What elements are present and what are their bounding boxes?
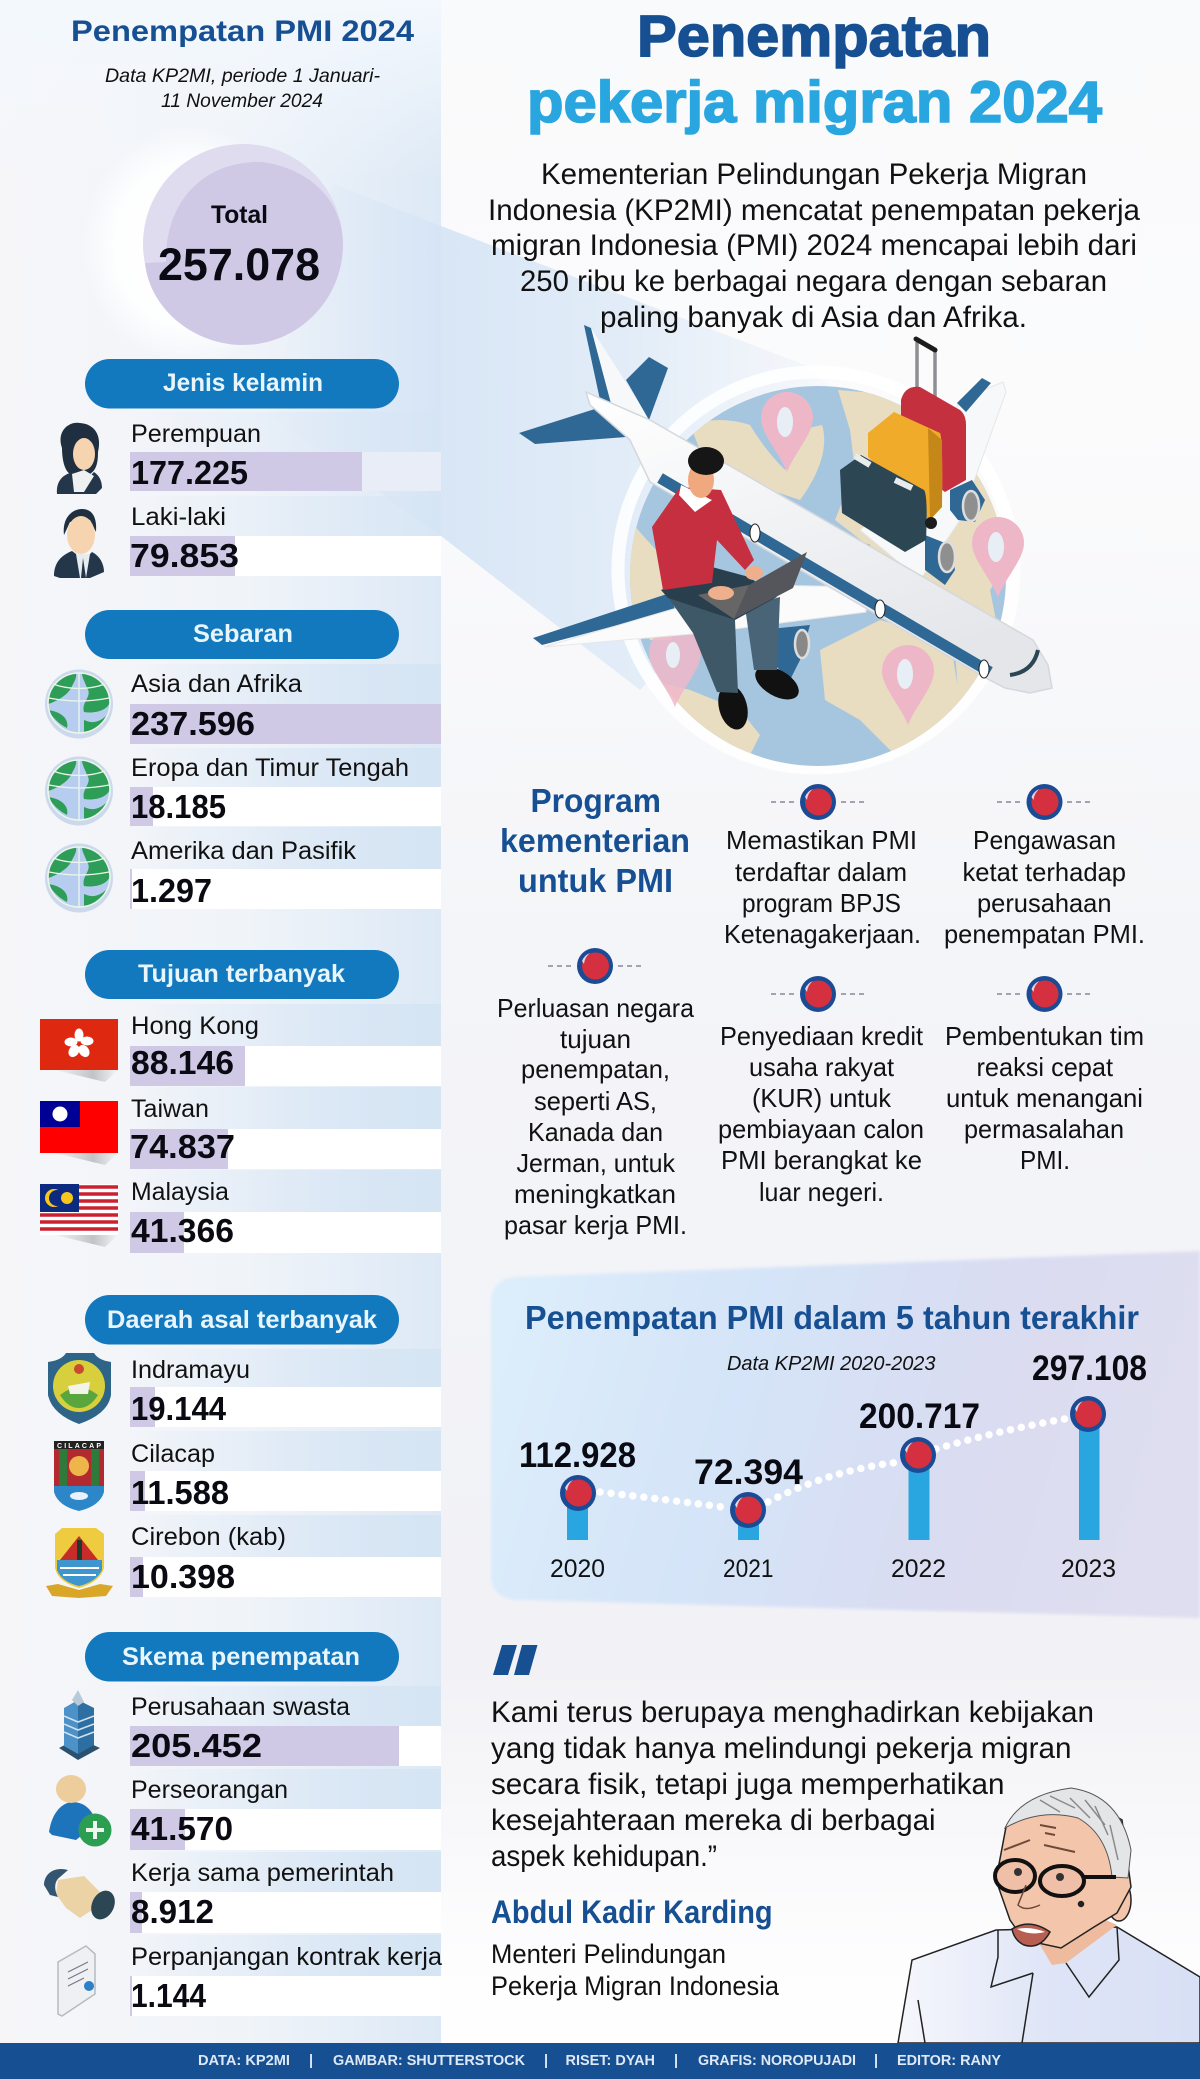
row: hong kong: 88.146 (131, 1044, 234, 1081)
footer credits: EDITOR: RANY (897, 2053, 1001, 2069)
icon: office building (59, 1690, 100, 1760)
row: laki-laki (130, 496, 441, 576)
row: perseorangan: Perseorangan (131, 1776, 288, 1804)
program item: perluasan: penempatan, (521, 1054, 670, 1084)
total circle (143, 144, 343, 345)
program item: perluasan: pasar kerja PMI. (504, 1210, 687, 1240)
row: kerja sama pemerintah: 8.912 (131, 1893, 214, 1930)
pill heading: Skema penempatan (122, 1643, 360, 1671)
panel: sebaran (45, 610, 441, 912)
footer credits: RISET: DYAH (566, 2053, 655, 2069)
intro paragraph (488, 158, 1140, 334)
row: perusahaan swasta (130, 1686, 441, 1766)
total circle: Total (211, 201, 268, 229)
row: amerika dan pasifik: Amerika dan Pasifik (131, 837, 356, 865)
panel: chart 5 tahun (491, 1251, 1200, 1618)
intro paragraph: paling banyak di Asia dan Afrika. (600, 301, 1027, 334)
year labels: 2023 (1061, 1555, 1116, 1583)
far wing and engines (830, 378, 1006, 600)
left column: data note (105, 65, 380, 112)
program item: pengawasan (944, 784, 1145, 949)
icon: woman (57, 423, 102, 494)
row: eropa dan timur tengah: Eropa dan Timur Tengah (131, 754, 409, 782)
row: hong kong (130, 1004, 441, 1086)
row: perseorangan: 41.570 (131, 1810, 233, 1847)
year labels: 2021 (723, 1555, 774, 1583)
speaker role: Menteri Pelindungan (491, 1939, 726, 1969)
program item: perluasan: Perluasan negara (497, 993, 695, 1023)
panel: skema penempatan (44, 1632, 442, 2016)
row: asia dan afrika: Asia dan Afrika (131, 670, 302, 698)
program item: kur: PMI berangkat ke (721, 1145, 922, 1175)
program item: bpjs: Ketenagakerjaan. (724, 919, 921, 949)
row: amerika dan pasifik (130, 827, 441, 909)
program item: pengawasan: Pengawasan (973, 825, 1116, 855)
program item: pengawasan: penempatan PMI. (944, 919, 1145, 949)
flag: malaysia (40, 1184, 118, 1247)
panel: tujuan terbanyak (40, 950, 441, 1253)
row: perempuan: 177.225 (131, 454, 248, 491)
quote text: secara fisik, tetapi juga memperhatikan (491, 1768, 1004, 1801)
quote text (491, 1696, 1094, 1873)
program item: perluasan (497, 948, 695, 1240)
icon: handshake (44, 1869, 119, 1923)
pill heading: Daerah asal terbanyak (107, 1306, 377, 1334)
intro paragraph: Indonesia (KP2MI) mencatat penempatan pekerja (488, 194, 1140, 227)
row: kerja sama pemerintah: Kerja sama pemerintah (131, 1859, 394, 1887)
row: perpanjangan kontrak kerja: Perpanjangan kontrak kerja (131, 1943, 442, 1971)
footer credits: | (874, 2053, 878, 2069)
footer credits: | (544, 2053, 548, 2069)
main title: Penempatan (637, 4, 991, 69)
row: cilacap: 11.588 (131, 1474, 229, 1511)
row: cilacap: Cilacap (131, 1440, 215, 1468)
program item: kur: usaha rakyat (749, 1052, 895, 1082)
row: kerja sama pemerintah (130, 1852, 441, 1933)
program item: kur: Penyediaan kredit (720, 1021, 924, 1051)
icon: globe (45, 670, 113, 738)
row: taiwan: 74.837 (130, 1128, 235, 1165)
row: asia dan afrika: 237.596 (131, 705, 255, 742)
quote text: yang tidak hanya melindungi pekerja migran (491, 1732, 1072, 1765)
point markers (560, 1396, 1106, 1528)
program item: perluasan: Jerman, untuk (516, 1148, 676, 1178)
year labels (550, 1555, 1116, 1583)
row: indramayu: 19.144 (131, 1390, 227, 1427)
icon: globe (45, 844, 113, 912)
panel: jenis kelamin (54, 359, 441, 578)
row: perempuan (130, 412, 441, 491)
program item: perluasan: meningkatkan (514, 1179, 676, 1209)
intro paragraph: 250 ribu ke berbagai negara dengan sebaran (520, 265, 1107, 298)
quote text: Kami terus berupaya menghadirkan kebijakan (491, 1696, 1094, 1729)
footer credits (0, 2043, 1200, 2079)
program item: kur: pembiayaan calon (718, 1114, 924, 1144)
row: eropa dan timur tengah: 18.185 (131, 788, 226, 825)
row: laki-laki: Laki-laki (131, 503, 226, 531)
illustration: migrant worker on plane over globe (519, 325, 1052, 768)
program item: tim reaksi cepat: untuk menangani (946, 1083, 1143, 1113)
values: 112.928 (519, 1436, 636, 1475)
program item: tim reaksi cepat: Pembentukan tim (945, 1021, 1144, 1051)
program heading: Program (530, 782, 661, 819)
row: cirebon: Cirebon (kab) (131, 1523, 286, 1551)
year labels: 2020 (550, 1555, 605, 1583)
left column: data note: 11 November 2024 (161, 90, 323, 112)
program item: bpjs: program BPJS (742, 888, 901, 918)
pill heading (85, 610, 399, 659)
row: taiwan (130, 1087, 441, 1169)
program item: tim reaksi cepat: PMI. (1020, 1145, 1070, 1175)
program item: kur: (KUR) untuk (752, 1083, 892, 1113)
main title (527, 4, 1102, 135)
quote text: kesejahteraan mereka di berbagai (491, 1804, 936, 1837)
pill heading: Jenis kelamin (163, 369, 323, 397)
panel: daerah asal terbanyak (46, 1295, 441, 1598)
luggage (840, 339, 966, 552)
row: perusahaan swasta: Perusahaan swasta (131, 1693, 350, 1721)
program item: pengawasan: perusahaan (977, 888, 1112, 918)
row: hong kong: Hong Kong (131, 1012, 259, 1040)
dotted trend line (600, 1418, 1070, 1508)
intro paragraph: migran Indonesia (PMI) 2024 mencapai lebih dari (491, 229, 1137, 262)
main title: pekerja migran 2024 (527, 70, 1102, 135)
emblem: indramayu (48, 1353, 111, 1424)
icon: person plus (49, 1775, 112, 1846)
program item: tim reaksi cepat: permasalahan (964, 1114, 1124, 1144)
program heading (500, 782, 690, 899)
row: malaysia: Malaysia (131, 1178, 229, 1206)
row: perusahaan swasta: 205.452 (131, 1727, 262, 1764)
pill heading: Sebaran (193, 620, 293, 648)
values: 297.108 (1032, 1349, 1147, 1388)
pill heading (85, 359, 399, 408)
speaker role: Pekerja Migran Indonesia (491, 1971, 780, 2001)
emblem: cilacap: CILACAP (57, 1443, 101, 1450)
program item: pengawasan: ketat terhadap (962, 857, 1126, 887)
row: laki-laki: 79.853 (130, 537, 239, 574)
map pins (649, 392, 1024, 725)
row: amerika dan pasifik: 1.297 (131, 872, 212, 909)
program item: perluasan: Kanada dan (528, 1117, 663, 1147)
emblem: cilacap (54, 1441, 104, 1511)
flag: taiwan (40, 1101, 118, 1165)
quote text: aspek kehidupan.” (491, 1840, 717, 1873)
program heading: untuk PMI (518, 862, 673, 899)
seated man with laptop (652, 447, 807, 733)
chart subtitle: Data KP2MI 2020-2023 (727, 1353, 936, 1375)
program item: bpjs: Memastikan PMI (726, 825, 917, 855)
globe (618, 372, 1014, 768)
pill heading (85, 950, 399, 999)
row: indramayu (130, 1349, 441, 1427)
row: cilacap (130, 1431, 441, 1511)
left column: data note: Data KP2MI, periode 1 Januari- (105, 65, 380, 87)
program heading: kementerian (500, 822, 690, 859)
icon: man (54, 509, 104, 578)
row: perpanjangan kontrak kerja: 1.144 (131, 1977, 207, 2014)
row: malaysia: 41.366 (131, 1212, 234, 1249)
pill heading (85, 1295, 399, 1344)
row: eropa dan timur tengah (130, 748, 441, 826)
portrait: minister (898, 1788, 1200, 2043)
plane (519, 325, 1052, 693)
row: perempuan: Perempuan (131, 420, 261, 448)
row: taiwan: Taiwan (131, 1095, 209, 1123)
program item: kur (718, 976, 924, 1207)
program item: kur: luar negeri. (759, 1177, 884, 1207)
speaker role (491, 1939, 780, 2001)
values: 200.717 (859, 1397, 980, 1436)
icon: document (58, 1946, 95, 2016)
row: perpanjangan kontrak kerja (130, 1935, 442, 2016)
footer credits: | (674, 2053, 678, 2069)
program item: tim reaksi cepat: reaksi cepat (976, 1052, 1114, 1082)
left column: title: Penempatan PMI 2024 (71, 15, 414, 48)
row: malaysia (130, 1170, 441, 1253)
row: cirebon (130, 1515, 441, 1597)
intro paragraph: Kementerian Pelindungan Pekerja Migran (541, 158, 1087, 191)
speaker name: Abdul Kadir Karding (491, 1894, 773, 1930)
footer credits: DATA: KP2MI (198, 2053, 290, 2069)
total circle: 257.078 (158, 239, 320, 290)
row: indramayu: Indramayu (131, 1356, 250, 1384)
program item: perluasan: tujuan (560, 1024, 631, 1054)
values (519, 1349, 1147, 1492)
year labels: 2022 (891, 1555, 946, 1583)
footer credits: | (309, 2053, 313, 2069)
icon: globe (45, 756, 113, 826)
row: asia dan afrika (130, 664, 441, 744)
chart title: Penempatan PMI dalam 5 tahun terakhir (525, 1299, 1139, 1336)
footer credits: GRAFIS: NOROPUJADI (698, 2053, 856, 2069)
program item: bpjs: terdaftar dalam (735, 857, 907, 887)
program item: perluasan: seperti AS, (534, 1086, 657, 1116)
row: perseorangan (130, 1769, 441, 1850)
pill heading (85, 1632, 399, 1682)
flag: hong kong (40, 1019, 118, 1082)
quote mark icon (493, 1645, 538, 1675)
row: cirebon: 10.398 (131, 1558, 235, 1595)
bars (567, 1414, 1100, 1540)
values: 72.394 (694, 1453, 804, 1492)
pill heading: Tujuan terbanyak (138, 960, 345, 988)
footer credits: GAMBAR: SHUTTERSTOCK (333, 2053, 526, 2069)
emblem: cirebon (46, 1528, 113, 1598)
program item: tim reaksi cepat (945, 976, 1144, 1175)
program item: bpjs (724, 784, 921, 949)
